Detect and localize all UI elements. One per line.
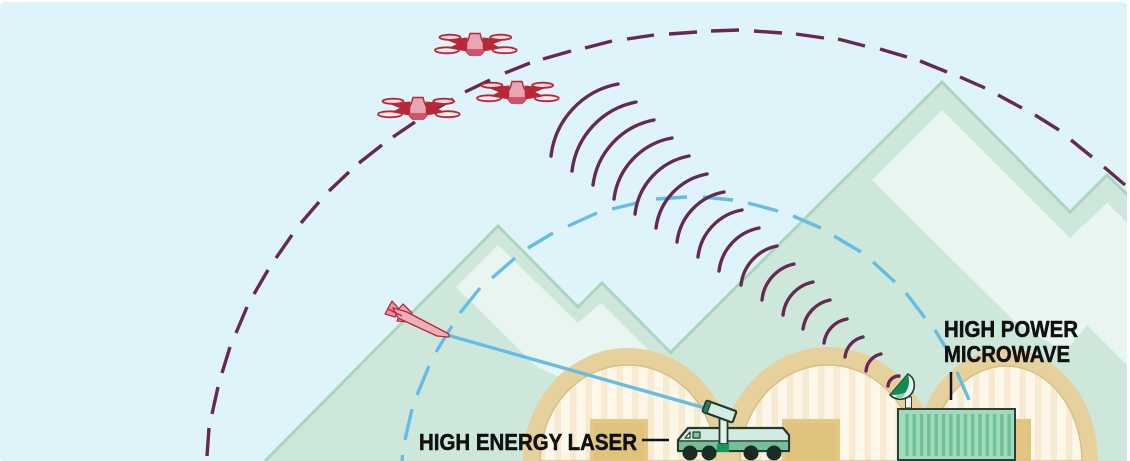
truck wheels [682, 446, 782, 460]
label: high power microwave: MICROWAVE [944, 341, 1070, 367]
laser mast [720, 412, 728, 444]
bunker left [523, 348, 733, 461]
outer range arc: drones [207, 30, 1125, 456]
icon: missile [385, 301, 449, 337]
back mountain range [665, 82, 1130, 461]
drone right [477, 82, 559, 103]
front mountain snow [456, 245, 648, 376]
bunker right [914, 349, 1098, 461]
label: high energy laser: HIGH ENERGY LASER [419, 429, 637, 455]
drone left [378, 98, 460, 119]
inner range arc: laser [402, 197, 969, 461]
truck body [678, 428, 789, 451]
label: high power microwave: HIGH POWER [944, 316, 1078, 342]
drone top [435, 34, 517, 55]
bunker middle [721, 347, 935, 461]
icon: microwave dish [890, 374, 914, 408]
label: high power microwave [944, 316, 1078, 400]
back mountain snow [872, 110, 1130, 368]
bunker right door [1000, 419, 1031, 461]
laser beam [447, 335, 705, 408]
icon: laser truck [678, 400, 789, 460]
front mountain range [265, 226, 720, 461]
bunker middle door [782, 419, 840, 461]
bunker left door [590, 419, 648, 461]
truck windows [693, 432, 700, 438]
microwave beam arcs [551, 84, 899, 386]
laser head [702, 400, 737, 423]
icon: shipping container [897, 408, 1016, 461]
